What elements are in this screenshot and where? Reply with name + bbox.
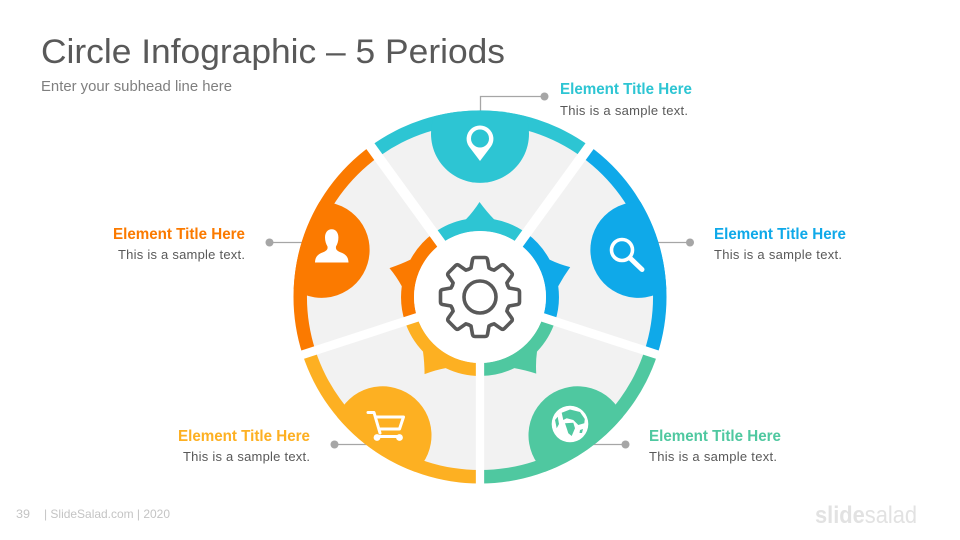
icon: map pin (467, 125, 493, 161)
label: top: This is a sample text. (560, 103, 688, 118)
icon: globe (552, 406, 588, 442)
label: right: This is a sample text. (714, 247, 842, 262)
label: bottom right (649, 428, 781, 464)
label: left: This is a sample text. (118, 247, 245, 262)
icon: magnifier (612, 240, 642, 270)
footer: page number: 39 (16, 507, 30, 521)
icon: center gear (440, 258, 520, 336)
connector: right (650, 238, 694, 246)
segment: bottom-right green (391, 233, 678, 512)
icon: person (315, 229, 348, 262)
connector: left (266, 238, 310, 246)
label: bottom left: This is a sample text. (183, 449, 310, 464)
icon: shopping cart (368, 412, 404, 440)
watermark logo: slidesalad (815, 502, 917, 529)
label: left: Element Title Here (113, 226, 245, 243)
label: right: Element Title Here (714, 226, 846, 243)
subhead: Enter your subhead line here (41, 79, 232, 95)
label: bottom right: Element Title Here (649, 428, 781, 445)
connector: bottom left (330, 440, 375, 448)
label: left (113, 226, 245, 262)
inner ring: five arrow segments (375, 202, 585, 401)
title: Circle Infographic – 5 Periods (41, 33, 505, 71)
label: top: Element Title Here (560, 81, 692, 98)
connector: top (480, 92, 548, 112)
label: bottom right: This is a sample text. (649, 449, 777, 464)
segment: top teal (370, 110, 590, 297)
segment: left orange (269, 135, 514, 401)
label: bottom left: Element Title Here (178, 428, 310, 445)
circular diagram (269, 110, 691, 512)
segment: right blue (446, 135, 691, 401)
label: right (714, 226, 846, 262)
footer: credit: | SlideSalad.com | 2020 (44, 507, 170, 521)
connector: bottom right (585, 440, 630, 448)
label: bottom left (178, 428, 310, 464)
segment: bottom-left yellow (282, 233, 569, 512)
label: top (560, 81, 692, 118)
